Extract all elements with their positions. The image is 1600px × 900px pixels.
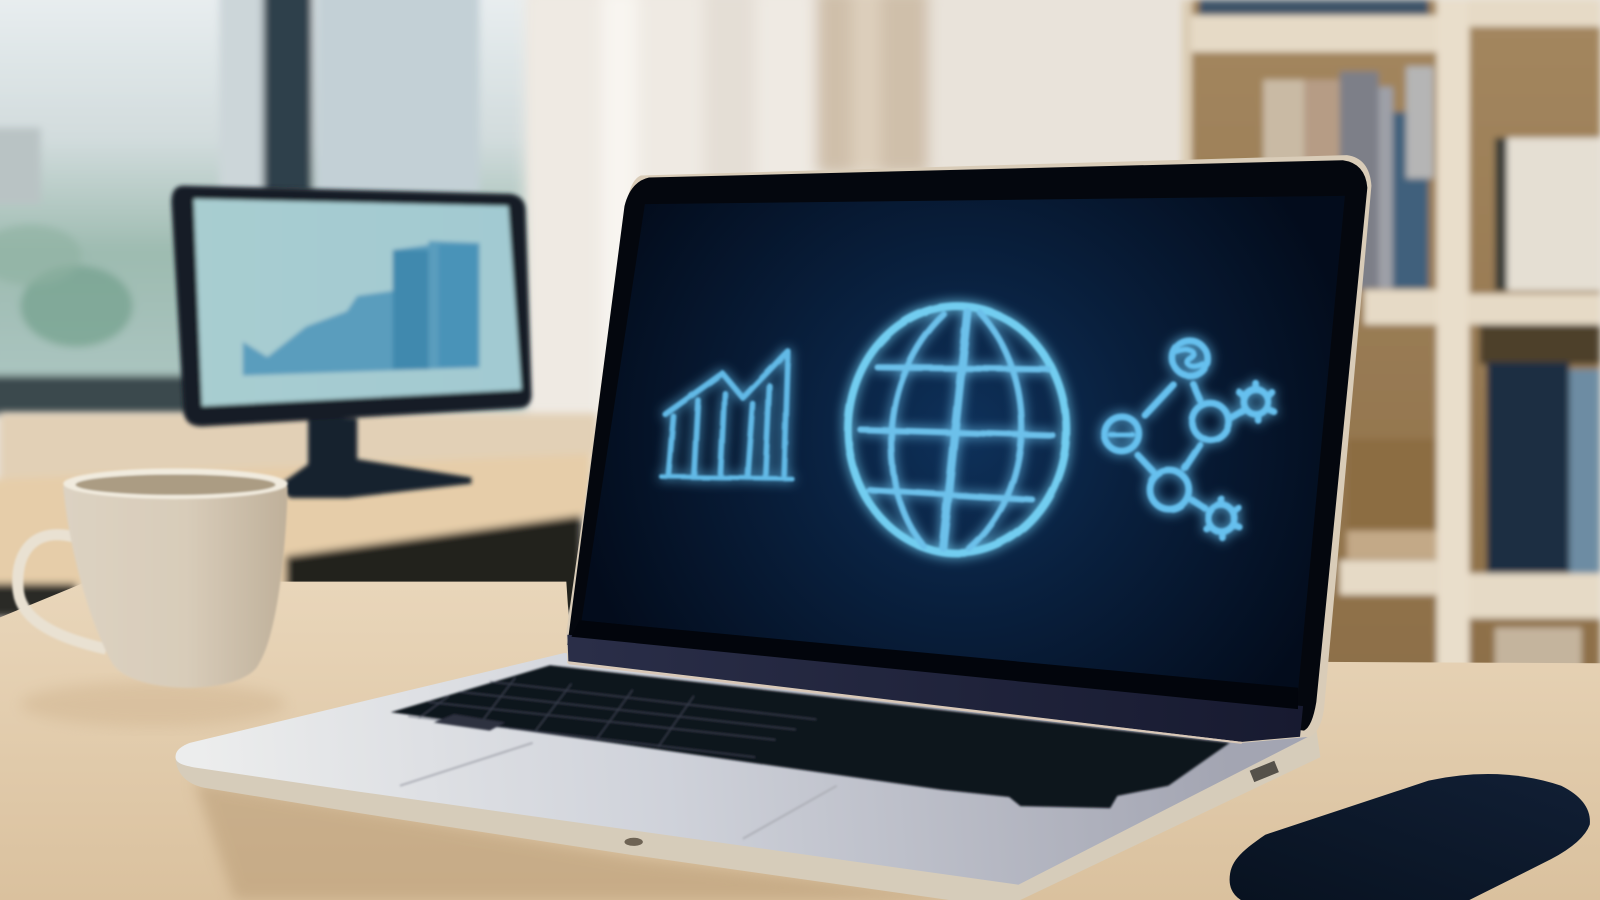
screen bezel <box>567 160 1367 731</box>
laptop <box>176 155 1371 900</box>
window <box>0 0 531 414</box>
lower books <box>1480 323 1600 364</box>
back desk <box>0 413 597 617</box>
keyboard <box>391 665 1230 808</box>
hinge strip <box>567 635 1303 742</box>
mug handle <box>18 535 106 649</box>
monitor screen <box>194 199 521 406</box>
icon: network nodes <box>1104 341 1274 538</box>
laptop side and front edge <box>176 730 1320 900</box>
monitor bar chart <box>243 241 480 376</box>
shelf boards <box>1190 15 1441 52</box>
hinge highlight <box>568 663 1242 743</box>
laptop shadow on desk <box>194 781 980 900</box>
icon: globe <box>848 306 1066 553</box>
coffee mug <box>18 468 288 688</box>
trackpad lines <box>400 743 837 839</box>
desk surface <box>0 582 1600 900</box>
computer mouse <box>1230 774 1590 900</box>
mug body <box>63 471 288 688</box>
front notch <box>624 838 643 846</box>
lid shell <box>566 155 1371 743</box>
logo label on the side <box>1250 761 1279 782</box>
icon: line and bar chart <box>661 351 792 479</box>
mug reflection <box>20 682 286 727</box>
background monitor <box>171 186 532 498</box>
monitor stand <box>276 418 471 498</box>
laptop base <box>176 653 1308 885</box>
screen bottom shadow <box>571 620 1298 709</box>
upper books <box>1263 80 1304 289</box>
curtain <box>526 0 1184 429</box>
shelf back panels <box>1184 0 1600 673</box>
bookshelf <box>1182 0 1600 673</box>
monitor frame <box>171 186 532 427</box>
mug rim <box>63 468 288 499</box>
screen display <box>582 196 1345 692</box>
